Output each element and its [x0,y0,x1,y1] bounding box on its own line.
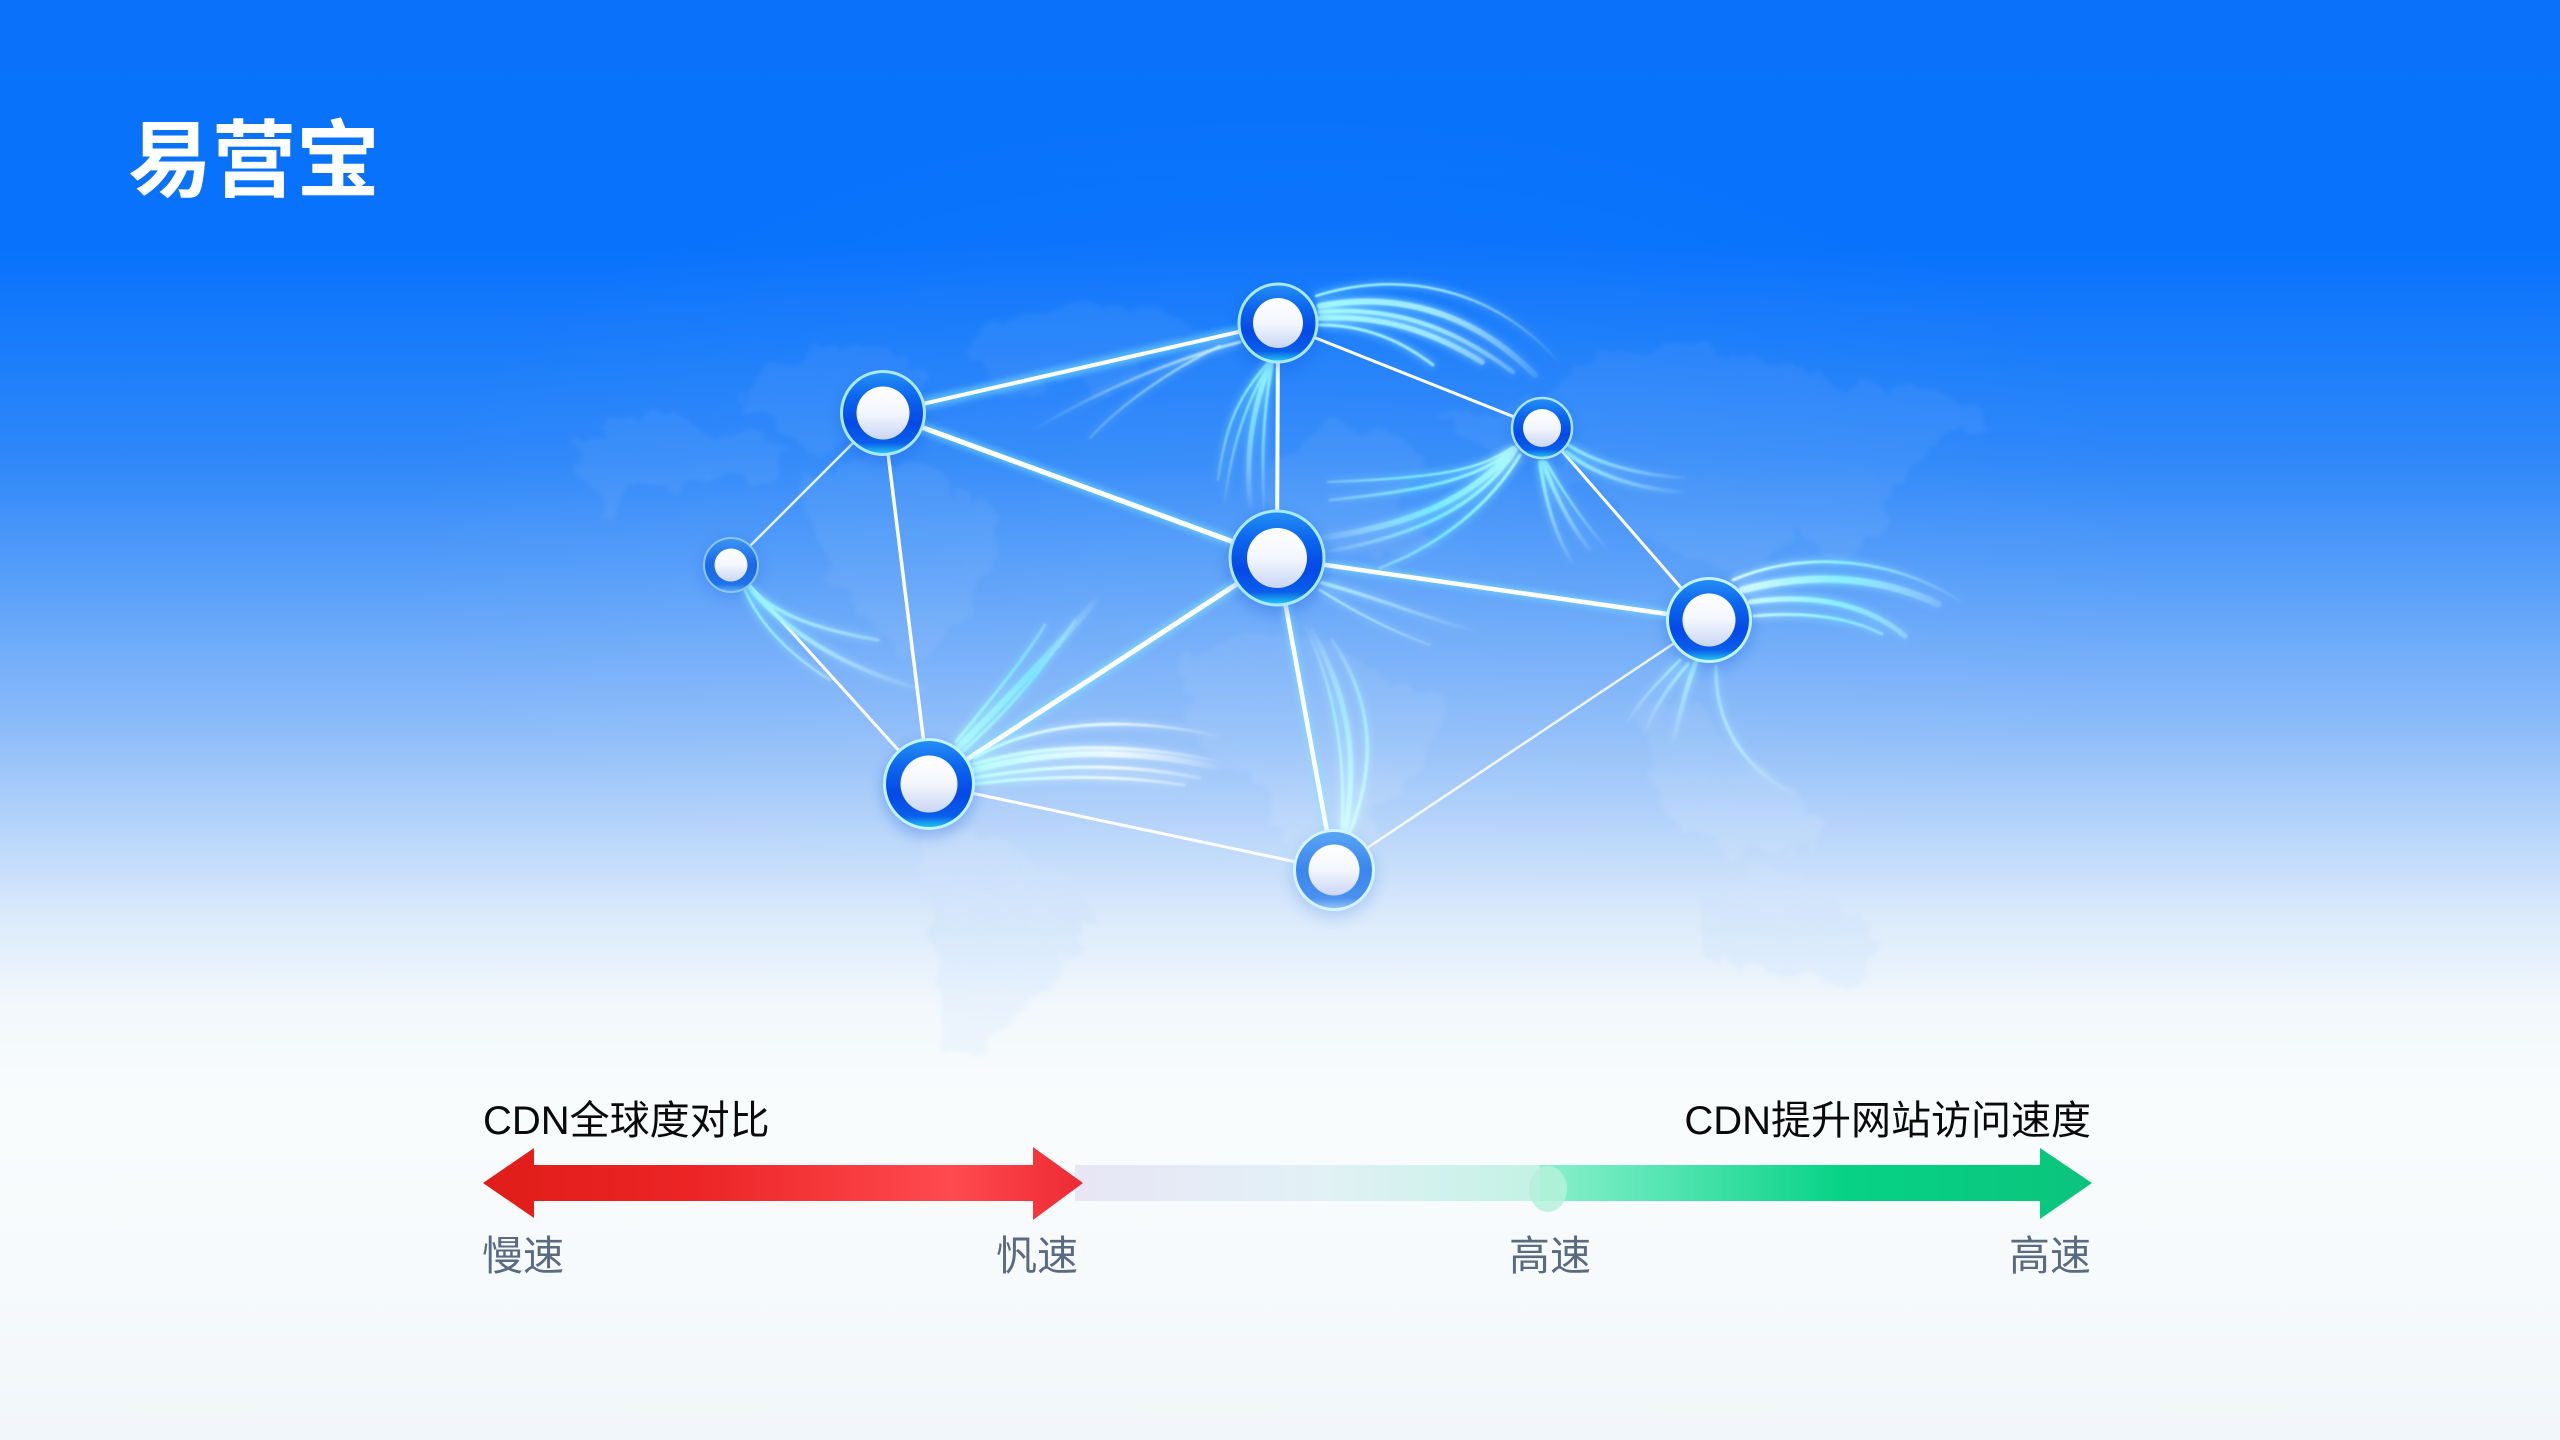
arrow: red double arrow [483,1147,1083,1220]
trails: top node left [1030,342,1240,438]
node: north-east [1510,398,1574,464]
line glows [883,323,1709,870]
trails: right node right [1733,562,1962,636]
map: south east asia [1640,700,1830,855]
scale heading: right: CDN提升网站访问速度 [1684,1099,2091,1143]
trails: top node right [1316,284,1563,375]
node: top [1236,284,1320,371]
network connection lines [731,323,1709,870]
trails: lower-left node right [974,724,1235,785]
trails: bottom node up [1305,625,1367,832]
scale label: high speed right: 高速 [2009,1233,2091,1279]
node: upper left [839,372,927,463]
trail: right node south arc [1716,667,1802,798]
map: australia [1700,870,1878,985]
trails: north-east node right [1566,445,1685,492]
world map watermark [572,302,1995,1055]
map: africa [1180,635,1445,905]
title: 易营宝 [128,114,380,208]
map: asia [1440,345,1995,570]
node: lower left [882,740,976,837]
trails: far-left node [745,587,933,692]
network nodes [702,284,1753,919]
trails: centre node down right [1320,583,1480,645]
scale label: high speed middle: 高速 [1509,1233,1591,1279]
speed scale [482,1099,2092,1279]
map: north america central [800,455,1000,660]
arrow: faded middle section [1075,1165,1555,1201]
map: south america [918,830,1092,1055]
arrow: green right arrow [1540,1148,2092,1219]
node: bottom [1291,830,1377,919]
trails: north-east node down [1540,462,1608,562]
node: far left [702,538,760,597]
trails: north-east node left [1322,447,1520,568]
scale heading: left: CDN全球度对比 [483,1099,770,1143]
scale label: fast: 忛速 [996,1233,1078,1279]
trails: right node down [1626,660,1696,745]
map: north america west [572,416,792,516]
trails: top node down [1218,363,1272,530]
trails: lower-left node up [956,592,1102,752]
marker: speed transition [1529,1166,1567,1212]
node: centre [1227,511,1327,614]
map: greenland [962,302,1200,398]
scale label: slow: 慢速 [482,1233,564,1279]
map: north america arctic [735,346,930,452]
light trails [745,284,1962,832]
node: right [1665,578,1753,670]
map: europe [1265,420,1440,560]
